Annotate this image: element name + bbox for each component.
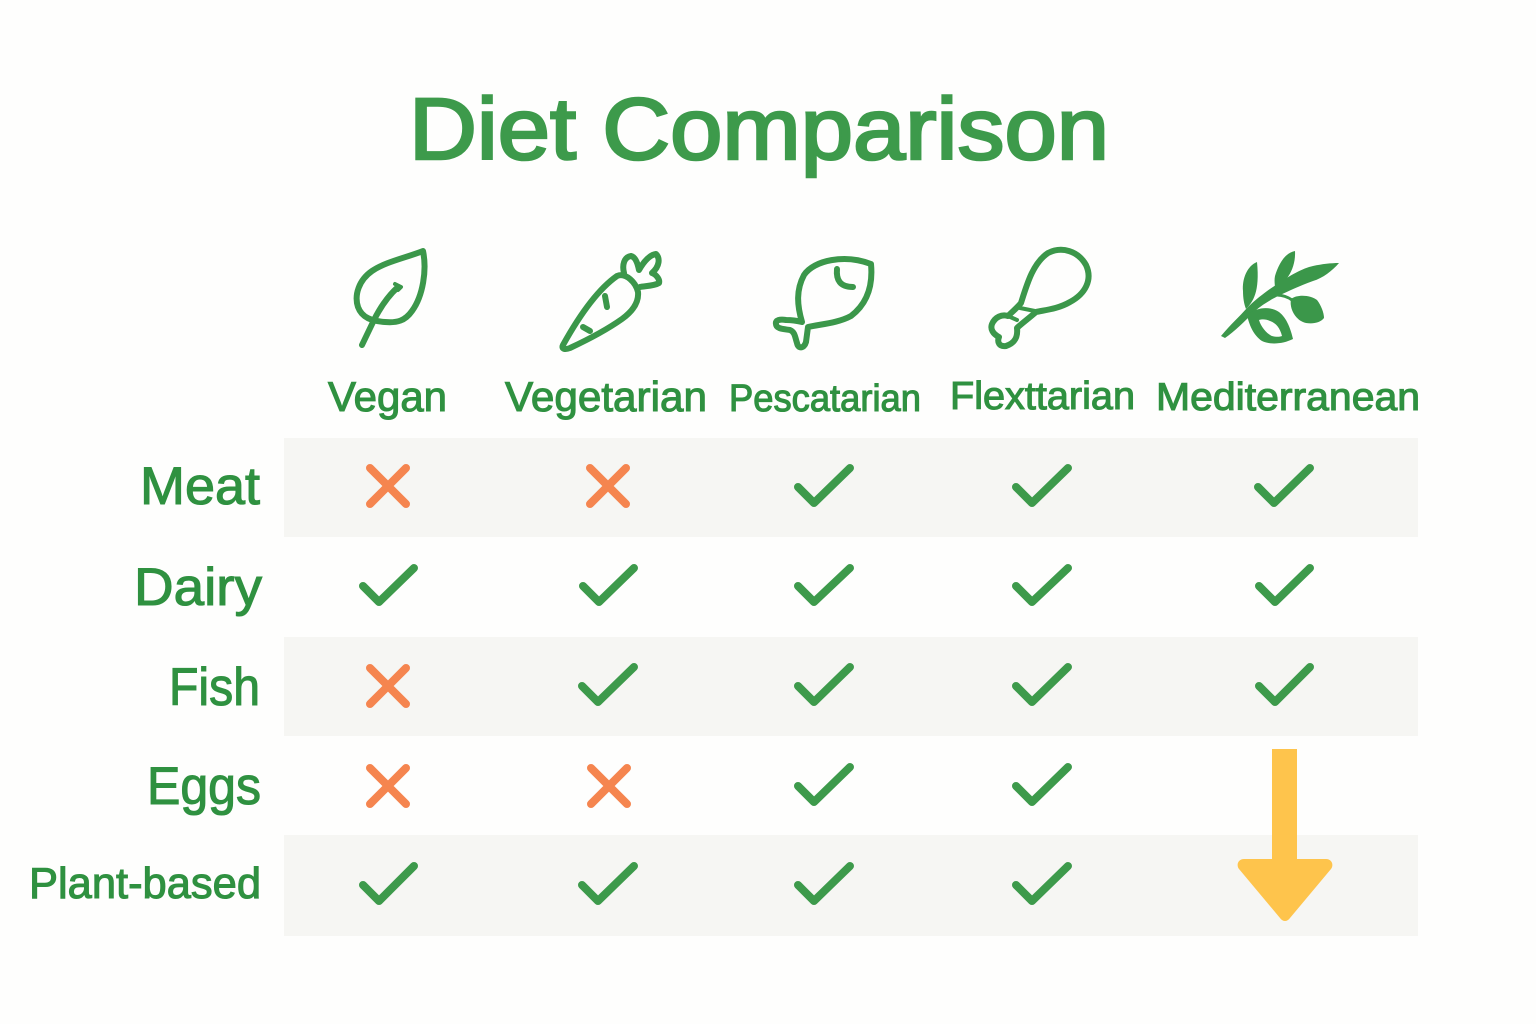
check: Pescatarian bbox=[798, 568, 850, 602]
row label: Plant-based: Plant-based bbox=[29, 859, 261, 908]
marks: Meat row bbox=[370, 468, 1310, 504]
cross: Vegan bbox=[370, 668, 406, 704]
column header: Mediterranean: Mediterranean bbox=[1156, 376, 1420, 419]
check: Mediterranean bbox=[1259, 568, 1310, 602]
column header: Pescatarian: Pescatarian bbox=[729, 378, 921, 420]
marks: Eggs row bbox=[370, 767, 1068, 804]
cross: Vegetarian bbox=[591, 768, 627, 804]
check: Vegetarian bbox=[582, 866, 634, 901]
cross: Vegan bbox=[370, 768, 406, 804]
check: Flexitarian bbox=[1016, 568, 1068, 602]
marks: Fish row bbox=[370, 667, 1310, 704]
row label: Meat: Meat bbox=[140, 457, 260, 516]
check: Flexitarian bbox=[1016, 468, 1068, 503]
column header: Flexttarian: Flexttarian bbox=[950, 375, 1135, 418]
icon: fish (Pescatarian) bbox=[776, 259, 871, 347]
check: Vegan bbox=[363, 568, 414, 602]
title: Diet Comparison bbox=[409, 81, 1109, 178]
check: Pescatarian bbox=[798, 468, 850, 503]
check: Mediterranean bbox=[1258, 468, 1310, 503]
row band: Plant-based bbox=[284, 835, 1418, 936]
arrow: downward yellow bbox=[1238, 749, 1332, 921]
check: Vegetarian bbox=[582, 667, 634, 702]
row band: Fish bbox=[284, 637, 1418, 736]
icon: olive branch (Mediterranean) bbox=[1221, 251, 1339, 343]
row label: Dairy: Dairy bbox=[134, 558, 263, 617]
cross: Vegetarian bbox=[590, 468, 626, 504]
marks: Plant-based row bbox=[363, 866, 1068, 901]
icon: chicken drumstick (Flexitarian) bbox=[991, 250, 1089, 346]
check: Flexitarian bbox=[1016, 767, 1068, 802]
column header: Vegan: Vegan bbox=[328, 373, 447, 420]
check: Pescatarian bbox=[798, 667, 850, 702]
icon: leaf (Vegan) bbox=[357, 251, 425, 345]
marks: Dairy row bbox=[363, 568, 1310, 602]
row label: Fish: Fish bbox=[169, 658, 260, 717]
check: Vegan bbox=[363, 866, 414, 901]
column header: Vegetarian: Vegetarian bbox=[505, 373, 707, 420]
check: Flexitarian bbox=[1016, 667, 1068, 702]
check: Flexitarian bbox=[1016, 866, 1068, 901]
cross: Vegan bbox=[370, 468, 406, 504]
row label: Eggs: Eggs bbox=[147, 757, 261, 816]
check: Pescatarian bbox=[798, 767, 850, 802]
check: Pescatarian bbox=[798, 866, 850, 901]
icon: carrot (Vegetarian) bbox=[562, 254, 659, 349]
check: Vegetarian bbox=[583, 568, 634, 602]
check: Mediterranean bbox=[1259, 667, 1310, 702]
row band: Meat bbox=[284, 438, 1418, 537]
